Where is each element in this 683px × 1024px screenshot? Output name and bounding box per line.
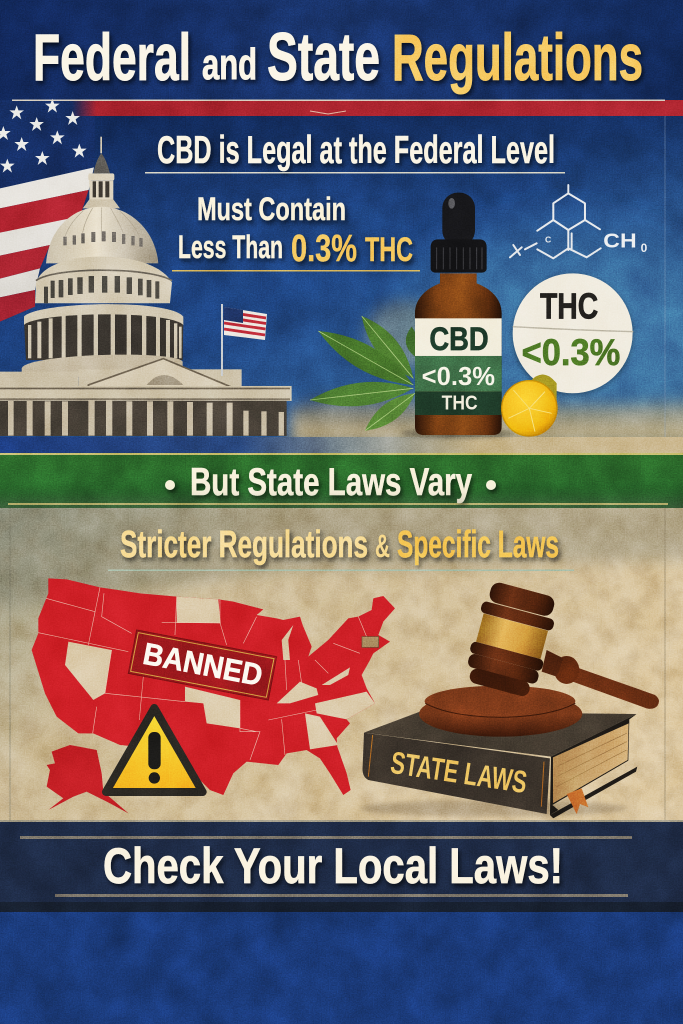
law book (363, 712, 637, 818)
text: must contain less than 0.3% THC: THC (365, 231, 413, 269)
panel: footer (0, 820, 683, 912)
icon: molecule: 0 (641, 241, 648, 255)
dome (46, 207, 158, 263)
icon: THC tablet: THC (540, 285, 598, 326)
icon: CBD dropper bottle: <0.3% (422, 361, 495, 391)
text: must contain less than 0.3% THC (172, 191, 420, 272)
icon: CBD dropper bottle: THC (442, 392, 478, 414)
state lines (38, 587, 367, 760)
title: Federal (33, 20, 191, 94)
bottom blue area (0, 912, 683, 1024)
subheading: & (375, 528, 390, 564)
text: must contain less than 0.3% THC: 0.3% (291, 228, 357, 270)
Alaska (47, 745, 128, 813)
American flag (0, 99, 95, 322)
icon: molecule: C (545, 235, 552, 245)
stamp (362, 637, 379, 647)
contiguous states (32, 578, 395, 795)
icon: molecule (510, 185, 648, 258)
icon: THC tablet (512, 273, 633, 396)
handle (542, 650, 659, 709)
title: State (267, 19, 380, 95)
gavel head (462, 580, 561, 699)
subheading: Stricter Regulations (120, 524, 368, 566)
subheading (108, 524, 574, 571)
icon: cannabis leaf (310, 316, 419, 431)
title: and (202, 40, 257, 89)
banner text: But State Laws Vary (190, 461, 472, 504)
law book: STATE LAWS (388, 745, 529, 800)
icon: THC tablet: <0.3% (522, 331, 620, 373)
icon: gavel on book (360, 580, 659, 818)
panel: green banner (0, 453, 683, 508)
panel: header (0, 0, 683, 102)
US map (32, 578, 395, 813)
footer text: Check Your Local Laws! (103, 838, 563, 894)
subheading: Specific Laws (397, 524, 559, 566)
wings and pediment (0, 372, 78, 386)
title (33, 19, 643, 95)
icon: lemon (502, 375, 557, 436)
icon: molecule: CH (603, 229, 637, 252)
text: must contain less than 0.3% THC: Must Contain (197, 191, 346, 227)
icon: CBD dropper bottle (402, 193, 515, 438)
red banner stripe (12, 100, 683, 116)
sound block (419, 686, 582, 737)
panel: federal (0, 99, 683, 455)
small flag on pole (221, 304, 267, 376)
banned sign: BANNED (140, 637, 265, 693)
colonnade (24, 306, 183, 360)
icon: CBD dropper bottle: CBD (429, 320, 489, 357)
warning triangle (106, 708, 203, 792)
spire and lantern (83, 137, 120, 208)
unrestricted states (65, 597, 375, 749)
text: must contain less than 0.3% THC: Less Than (178, 229, 283, 265)
Capitol building (0, 137, 292, 436)
panel: state (0, 500, 683, 822)
